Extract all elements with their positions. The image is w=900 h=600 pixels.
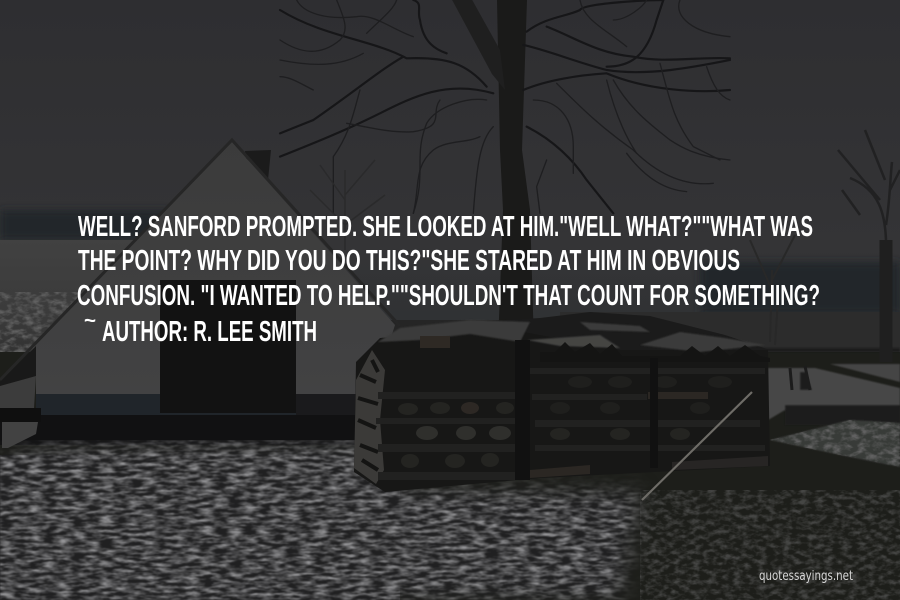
main branches [280, 0, 730, 213]
snow on top [378, 320, 765, 352]
background trees [310, 130, 900, 390]
watermark: quotessayings.net [759, 569, 853, 584]
snowy fields at left [0, 240, 133, 352]
chimney [245, 150, 271, 180]
woodpile [354, 312, 770, 492]
trunk and main limb [497, 0, 534, 345]
author name: AUTHOR: R. LEE SMITH [102, 316, 317, 348]
right side snow and wall [740, 348, 900, 467]
house [0, 140, 400, 448]
snowy log ends at left [354, 350, 385, 484]
right foreground tree [880, 240, 892, 362]
roof edges [0, 140, 400, 380]
stake line [642, 392, 752, 500]
posts [515, 340, 658, 480]
logs [398, 376, 732, 468]
fence line [790, 366, 810, 390]
door [160, 280, 296, 413]
distant horizon band [0, 210, 900, 352]
left shed block [0, 408, 41, 422]
ground base [0, 352, 900, 600]
tilde mark: ~ [84, 310, 96, 332]
roof underside [0, 346, 36, 386]
author attribution [84, 310, 317, 348]
tree behind house [310, 160, 385, 250]
ground snow texture [0, 420, 900, 600]
brown planks [420, 336, 768, 478]
sky [0, 0, 900, 320]
quote text [77, 211, 820, 312]
stack body [354, 328, 770, 492]
far top of pile [470, 312, 770, 350]
large bare tree [280, 0, 730, 345]
plinth [36, 394, 356, 415]
distant thin trees [750, 235, 795, 345]
house wall [36, 142, 395, 396]
fine branches [280, 0, 730, 213]
zigzag log tops [540, 342, 770, 362]
horizontal boards [376, 368, 765, 480]
left snow bank [0, 376, 36, 408]
